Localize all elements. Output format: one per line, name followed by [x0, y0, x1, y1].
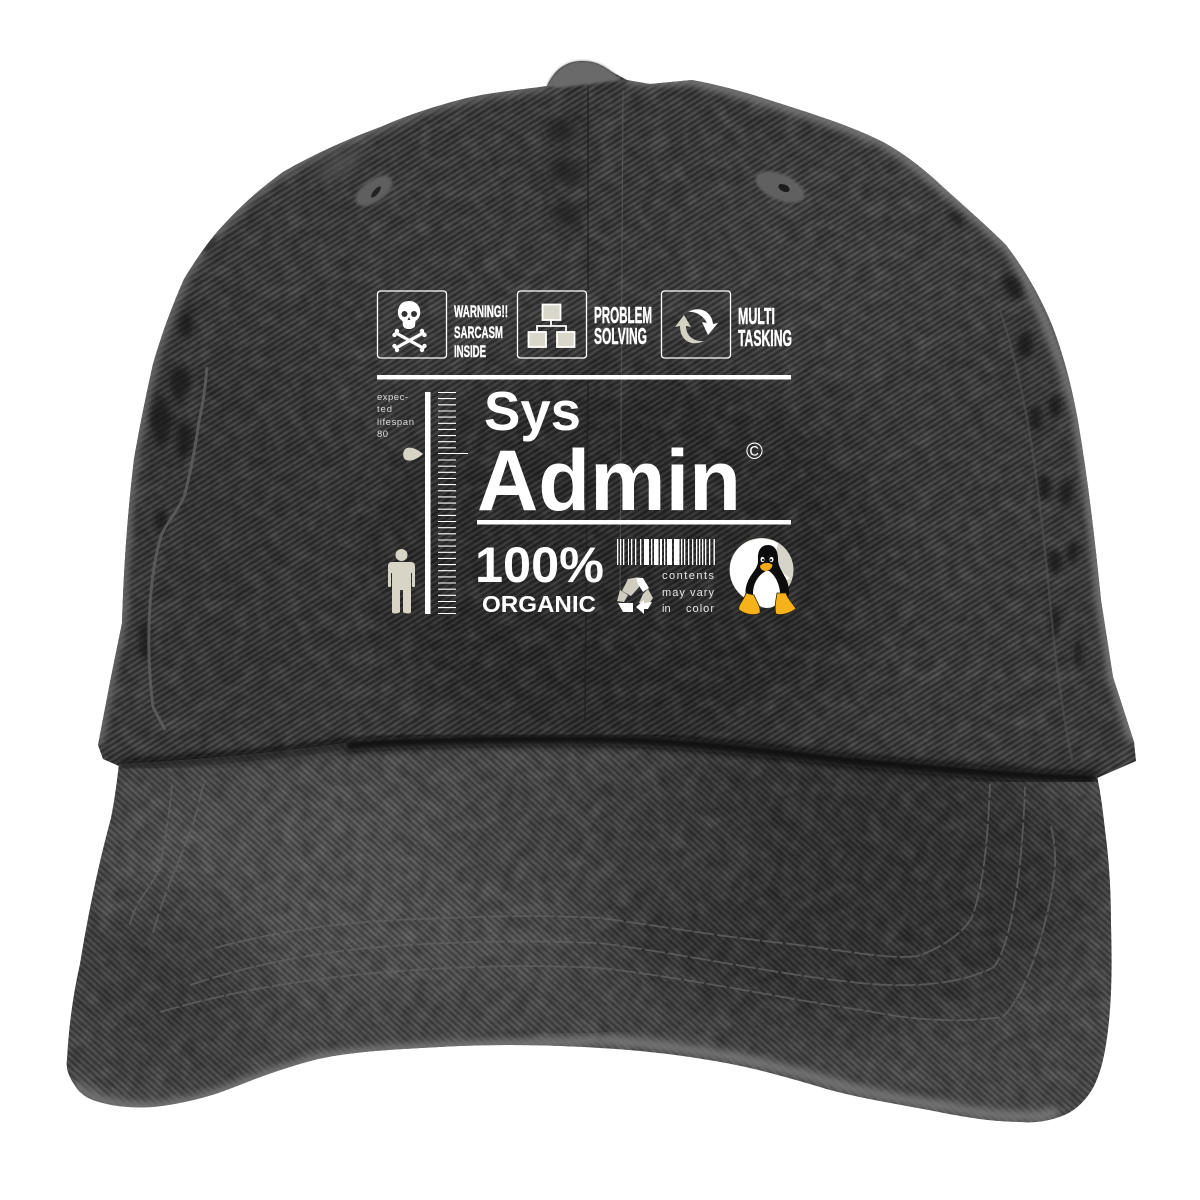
icon: skull	[398, 301, 420, 329]
lifespan bar	[425, 392, 430, 614]
ORGANIC: ORGANIC	[482, 591, 596, 617]
middle rule	[477, 520, 791, 524]
problem solving text: PROBLEM	[594, 302, 652, 328]
crown side seam right	[1000, 310, 1072, 760]
crown side seam left	[149, 367, 207, 730]
100%: 100%	[475, 537, 604, 593]
problem solving text	[594, 302, 652, 349]
problem solving text: SOLVING	[594, 323, 647, 349]
expected lifespan text	[377, 392, 414, 440]
multi tasking text: MULTI	[738, 303, 775, 329]
icon: cycle box	[662, 291, 730, 358]
contents may vary text	[662, 570, 714, 615]
multi tasking text	[738, 303, 792, 351]
eyelet right	[754, 170, 806, 204]
warning text: WARNING!!	[454, 303, 508, 321]
icon: Linux penguin	[730, 538, 796, 615]
top rule	[377, 375, 791, 380]
contents may vary text: in	[662, 603, 671, 615]
side wash blotches	[139, 208, 1082, 669]
printed label	[377, 291, 796, 617]
contents may vary text: may vary	[662, 587, 714, 599]
contents may vary text: color	[686, 603, 714, 615]
icon: skull box	[378, 291, 446, 358]
cap crown	[0, 0, 1200, 800]
warning text: INSIDE	[454, 343, 486, 361]
expected lifespan text: 80	[377, 429, 388, 440]
crown hem band shadow	[119, 739, 1097, 778]
barcode	[617, 539, 715, 565]
title: Sys: Sys	[484, 380, 581, 442]
copyright mark: ©	[746, 438, 763, 464]
icon: crossbones	[392, 329, 427, 352]
multi tasking text: TASKING	[738, 325, 792, 351]
cap button	[547, 61, 622, 88]
expected lifespan text: expec-	[377, 392, 408, 403]
warning text: SARCASM	[454, 324, 503, 342]
expected lifespan text: ted	[377, 404, 392, 415]
icon: teardrop marker	[403, 448, 423, 461]
warning text	[454, 303, 508, 361]
centre seam	[585, 85, 588, 720]
top centre wash blotches	[311, 118, 582, 226]
brim stitching	[130, 780, 1055, 1020]
icon: recycle symbol	[617, 578, 653, 614]
lifespan ruler ticks	[438, 392, 468, 614]
expected lifespan text: lifespan	[377, 417, 414, 428]
cap brim	[66, 736, 1112, 1122]
icon: person	[388, 549, 415, 614]
contents may vary text: contents	[662, 570, 714, 582]
eyelet left	[354, 175, 393, 207]
title: Admin: Admin	[477, 433, 741, 529]
icon: hierarchy box	[518, 291, 586, 358]
